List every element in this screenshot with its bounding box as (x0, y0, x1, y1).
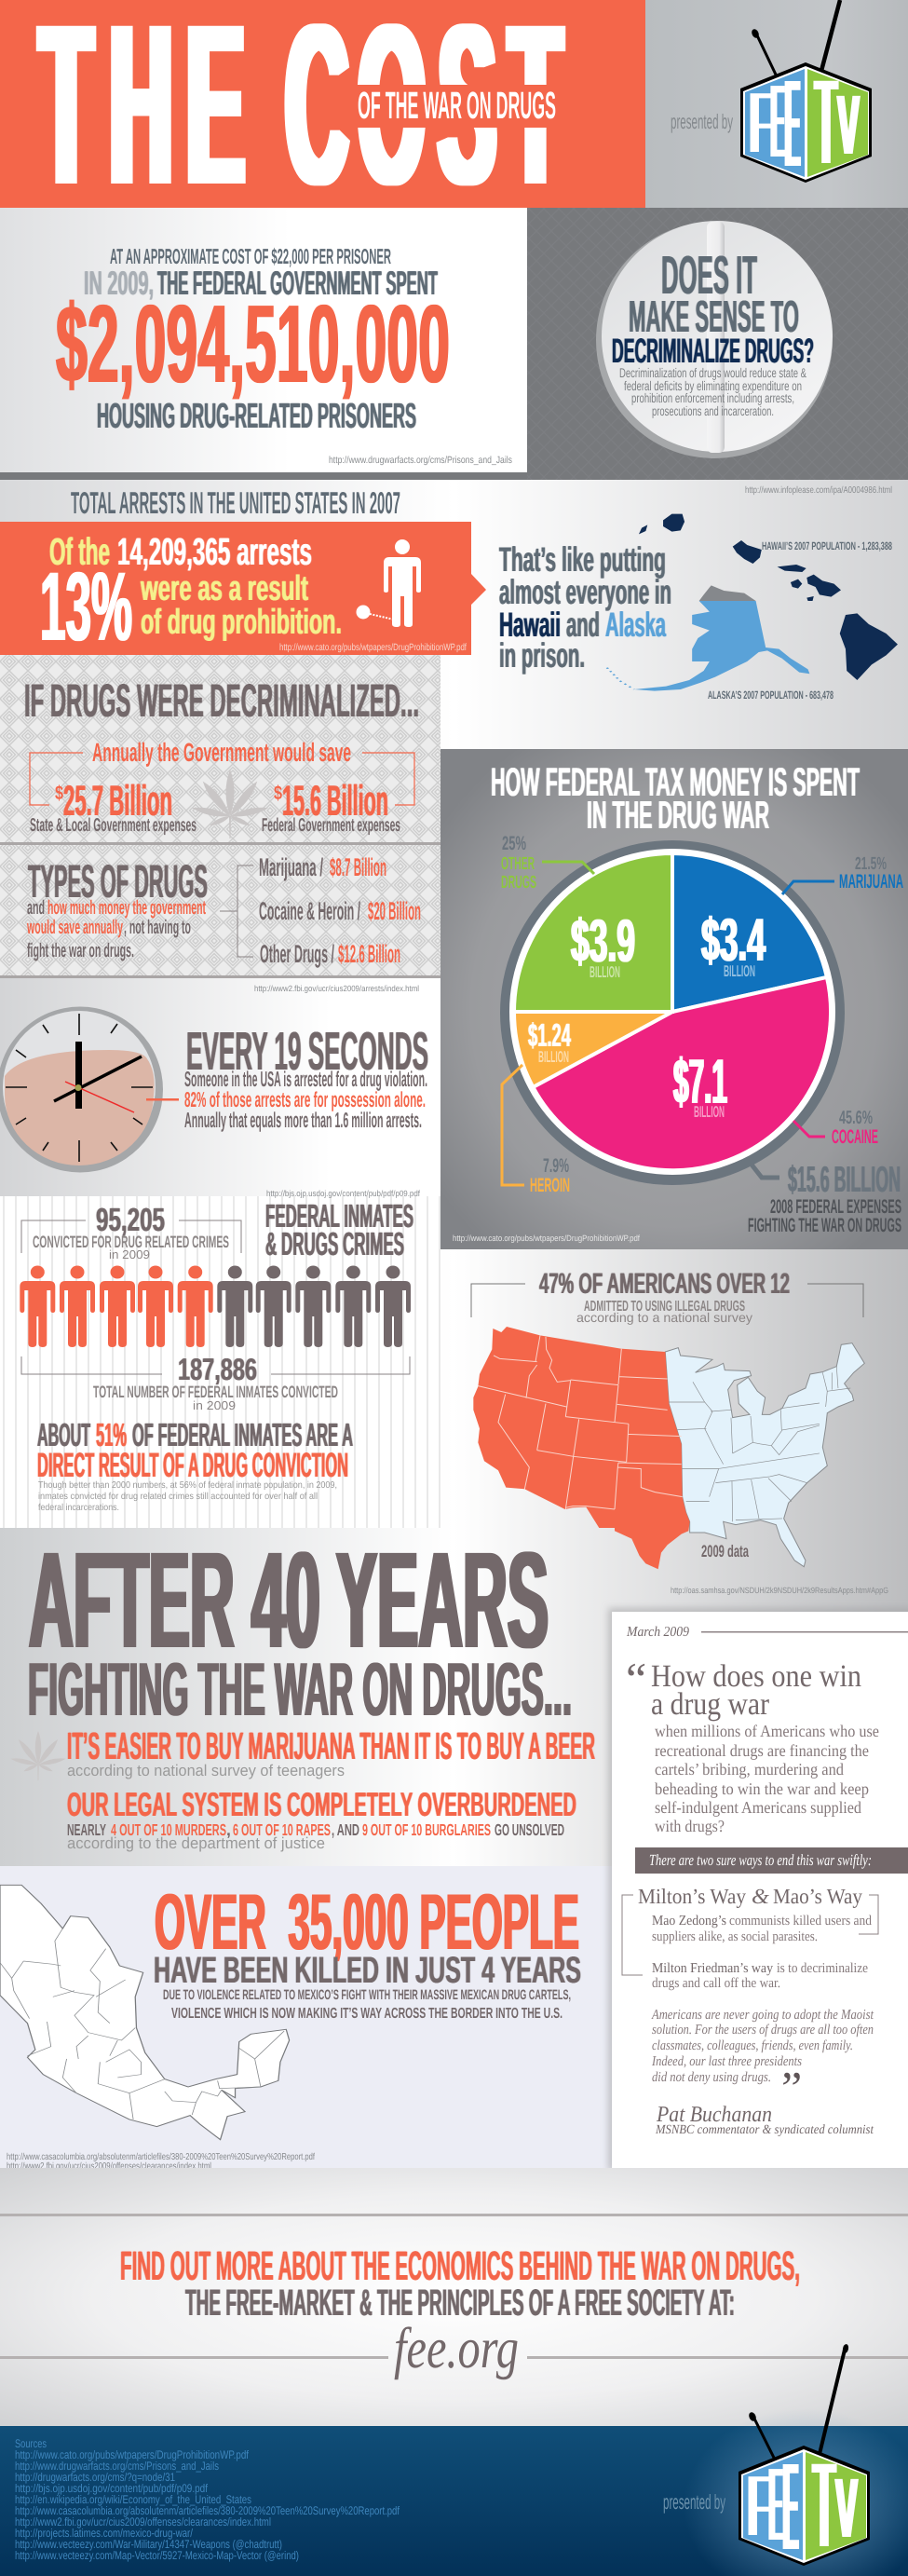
icon: FEE TV logo: V (835, 2456, 858, 2559)
text: sources list: http://en.wikipedia.org/wiki/Economy_of_the_United_States (15, 2493, 251, 2506)
text: how much money: would save annually (26, 917, 123, 938)
panel: Mexico (0, 1866, 615, 2172)
text: inmate explanation (38, 1480, 337, 1513)
map: United States (473, 1327, 864, 1569)
text: question body: with drugs? (655, 1817, 725, 1835)
text: unsolved crimes: NEARLY (67, 1820, 106, 1839)
panel: federal inmates (0, 1189, 440, 1528)
text: question body: recreational drugs are financing the (655, 1741, 869, 1760)
stat: federal savings (262, 776, 400, 836)
map: eastern states (665, 1343, 864, 1567)
text: unsolved crimes: GO UNSOLVED (495, 1820, 564, 1839)
icon: FEE TV logo: F (748, 2454, 769, 2558)
text: unsolved crimes: 9 OUT OF 10 BURGLARIES (362, 1820, 491, 1839)
stat: state and local savings (30, 776, 197, 836)
text: survey of teenagers: according to national survey of teenagers (67, 1762, 345, 1779)
text: sources list: http://www.drugwarfacts.org/cms/Prisons_and_Jails (15, 2460, 219, 2473)
panel: total arrests and population (0, 480, 908, 749)
slice value: other drugs (571, 906, 635, 981)
logo glow (684, 2408, 908, 2576)
text: Maoist solution: Indeed, our last three presidents (651, 2054, 802, 2069)
map: western states (473, 1327, 690, 1569)
text: attribution (655, 2103, 874, 2137)
stat: 187,886: 187,886 (178, 1352, 257, 1386)
panel: illegal drug use map (440, 1249, 908, 1622)
text: date: March 2009 (626, 1625, 689, 1640)
source url: http://www.cato.org/pubs/wtpapers/DrugProhibitionWP.pdf (279, 642, 467, 653)
label: convicted for drug crimes: CONVICTED FOR DRUG RELATED CRIMES (33, 1233, 229, 1251)
text: unsolved crimes (67, 1820, 564, 1839)
slice value: heroin (528, 1017, 571, 1066)
text: department of justice: according to the department of justice (67, 1834, 325, 1852)
bracket: drug list (220, 865, 253, 957)
label: in 2009: in 2009 (109, 1247, 150, 1261)
text: sources list: http://www.vecteezy.com/Map-Vector/5927-Mexico-Map-Vector (@erind) (15, 2549, 299, 2562)
text: unsolved crimes: 6 OUT OF 10 RAPES (233, 1820, 331, 1839)
banner: two sure ways (635, 1847, 908, 1874)
label: heroin: HEROIN (530, 1175, 570, 1196)
panel: total arrests and population: TOTAL ARRESTS IN THE UNITED STATES IN 2007 (71, 485, 400, 520)
icon: prisoner with ball and chain (356, 539, 421, 627)
chart: pie (500, 840, 845, 1185)
text: arrest statistics (184, 1067, 427, 1132)
icon: FEE TV logo: E (785, 49, 800, 197)
text: sources list: http://www.casacolumbia.org/absolutenm/articlefiles/380-2009%20Teen%20Survey%20Report.pdf (15, 2504, 400, 2517)
text: EVERY 19 SECONDS (186, 1021, 428, 1082)
map: Hawaii islands (639, 514, 898, 680)
text: ways comparison (652, 1914, 872, 1991)
text: inmate explanation: federal incarcerations. (38, 1503, 119, 1513)
panel: header title: OF THE WAR ON DRUGS (358, 84, 556, 127)
source urls: http://www2.fbi.gov/ucr/cius2009/offenses/clearances/index.html (7, 2161, 211, 2172)
panel: prisoner cost: THE FEDERAL GOVERNMENT SPENT (157, 264, 438, 302)
heading: federal inmates (265, 1198, 413, 1262)
heading: Milton's Way and Mao's Way: Milton’s Way (638, 1885, 746, 1908)
list: drug savings (259, 853, 421, 968)
heading: federal inmates: & DRUGS CRIMES (265, 1226, 404, 1262)
source urls: http://www.casacolumbia.org/absolutenm/articlefiles/380-2009%20Teen%20Survey%20Report.pdf (7, 2152, 315, 2162)
heading: about 51 percent: ABOUT (37, 1417, 90, 1453)
label: other drugs: 25% (502, 833, 526, 854)
heading: how does one win: How does one win (651, 1659, 861, 1694)
list: drug savings: Marijuana / (259, 853, 323, 881)
source url: http://www.drugwarfacts.org/cms/Prisons_and_Jails (329, 455, 512, 466)
label: other drugs (501, 833, 536, 893)
icons: ten inmate figures (20, 1265, 411, 1347)
bracket: survey (471, 1284, 863, 1317)
text: question body: when millions of Americans who use (655, 1722, 879, 1740)
text: question body: self-indulgent Americans supplied (655, 1798, 861, 1817)
presented by label: presented by (671, 110, 733, 133)
panel: federal inmates: OF FEDERAL INMATES ARE A (132, 1417, 353, 1453)
icon: FEE TV logo: V (837, 73, 860, 176)
slice value: cocaine (673, 1046, 727, 1121)
icon: cannabis leaf (191, 770, 269, 838)
label: cocaine (832, 1108, 878, 1148)
map: Mexico (0, 1885, 290, 2140)
panel: prisoner cost (0, 208, 527, 472)
panel: header title (0, 0, 645, 233)
text: pill explanation (619, 365, 806, 418)
text: pill explanation: federal deficits by eliminating expenditure on (624, 378, 802, 393)
text: sources list: http://www2.fbi.gov/ucr/cius2009/offenses/clearances/index.html (15, 2515, 271, 2528)
list: drug savings: Other Drugs / (260, 940, 334, 968)
panel: call to action (0, 2168, 908, 2426)
text: ways comparison: is to decriminalize (777, 1961, 868, 1976)
icon: cannabis leaf (10, 1731, 66, 1780)
panel: does it make sense (0, 208, 908, 480)
callout lines (502, 862, 834, 1185)
text: like putting in prison: in prison. (499, 636, 585, 675)
text: like putting in prison: That’s like putting (499, 540, 666, 579)
panel: federal tax money pie chart (440, 749, 908, 1249)
connector line (146, 1098, 179, 1101)
text: like putting in prison: Hawaii (499, 606, 561, 644)
text: Maoist solution (651, 2008, 874, 2085)
slice value: heroin: BILLION (538, 1048, 569, 1066)
label: 2009 data: 2009 data (701, 1542, 750, 1561)
source urls (7, 2152, 315, 2172)
heading: how does one win: a drug war (651, 1687, 770, 1722)
panel: after 40 years (0, 1524, 615, 1866)
icon: FEE TV logo (739, 2343, 870, 2576)
heading: how does one win (651, 1659, 861, 1722)
panel: prisoner cost: AT AN APPROXIMATE COST OF $22,000 PER PRISONER (110, 244, 391, 268)
text: arrests count: 14,209,365 arrests (117, 530, 312, 573)
text: like putting in prison: almost everyone in (499, 573, 671, 611)
icon: FEE TV logo: E (783, 2433, 798, 2576)
text: sources list: http://projects.latimes.com/mexico-drug-war/ (15, 2527, 193, 2540)
list: drug savings: $12.6 Billion (338, 940, 400, 968)
heading: Milton's Way and Mao's Way (638, 1885, 862, 1908)
text: question body: beheading to win the war and keep (655, 1779, 869, 1798)
stat: state and local savings: $ (55, 783, 63, 804)
label: marijuana (839, 854, 903, 893)
text: unsolved crimes: , (226, 1820, 231, 1839)
list: drug savings: Cocaine & Heroin / (259, 897, 360, 925)
text: violence explanation: VIOLENCE WHICH IS NOW MAKING IT’S WAY ACROSS THE BORDER INTO THE U.S. (171, 2006, 562, 2022)
text: admitted: ADMITTED TO USING ILLEGAL DRUGS (584, 1299, 745, 1315)
text: attribution: MSNBC commentator & syndicated columnist (655, 2123, 874, 2137)
stat: 95,205: 95,205 (96, 1202, 165, 1238)
text: inmate explanation: Though better than 2000 numbers, at 56% of federal inmate population, in 2009, (38, 1480, 337, 1491)
text: ways comparison: communists killed users and (729, 1914, 872, 1929)
panel: footer sources (0, 2343, 908, 2576)
text: how much money: , not having to (124, 917, 191, 938)
text: sources list: http://www.cato.org/pubs/wtpapers/DrugProhibitionWP.pdf (15, 2448, 249, 2461)
label: heroin (530, 1155, 570, 1196)
label: other drugs: DRUGS (501, 873, 536, 893)
panel: Pat Buchanan quote (608, 1608, 908, 2171)
band behind subtitle (347, 85, 580, 128)
slice value: marijuana: $3.4 (701, 906, 766, 974)
text: ways comparison: drugs and call off the war. (652, 1976, 780, 1991)
map: Alaska (607, 585, 809, 691)
text: question body (655, 1722, 879, 1835)
heading: killed in 4 years: HAVE BEEN KILLED IN JUST 4 YEARS (154, 1950, 581, 1991)
panel: federal tax money pie chart: $7.1 (673, 1046, 727, 1117)
icon: FEE TV logo: T (815, 51, 837, 194)
heading: Milton's Way and Mao's Way: & (752, 1885, 769, 1908)
heading: Milton's Way and Mao's Way: Mao’s Way (773, 1885, 862, 1908)
slice value: marijuana (701, 906, 766, 980)
text: inmate explanation: inmates convicted for drug related crimes still accounted for over half of all (38, 1492, 318, 1502)
banner: 13 percent arrests: 13% (40, 552, 132, 661)
panel: if drugs were decriminalized: $20 Billion (368, 897, 421, 925)
source url: http://www2.fbi.gov/ucr/cius2009/arrests/index.html (254, 984, 419, 993)
bracket: savings (30, 753, 414, 805)
panel: prisoner cost: HOUSING DRUG-RELATED PRISONERS (97, 397, 416, 436)
slice value: other drugs: BILLION (590, 963, 620, 981)
opening quote mark: “ (626, 1653, 646, 1705)
big number: $2,094,510,000 (56, 282, 450, 406)
text: like putting in prison: Alaska (605, 606, 666, 644)
list: drug savings: $8.7 Billion (330, 853, 386, 881)
text: Maoist solution: did not deny using drugs. (652, 2070, 771, 2085)
panel: presented by FEE TV (645, 0, 908, 208)
stat: state and local savings: 25.7 Billion (63, 776, 172, 825)
text: how much money: and (27, 897, 45, 919)
text: sources list: Sources (15, 2437, 47, 2450)
slice value: cocaine: BILLION (694, 1103, 725, 1121)
text: question body: cartels’ bribing, murdering and (655, 1760, 844, 1779)
text: pill explanation: Decriminalization of drugs would reduce state & (619, 365, 806, 380)
slice value: heroin: $1.24 (528, 1017, 571, 1054)
text: sources list: http://www.vecteezy.com/War-Military/14347-Weapons (@chadtrutt) (15, 2538, 282, 2551)
panel: federal inmates: DIRECT RESULT OF A DRUG CONVICTION (37, 1446, 348, 1484)
panel: if drugs were decriminalized (0, 655, 440, 978)
text: were as a result: were as a result (140, 569, 308, 608)
stat: federal savings: $ (274, 783, 282, 804)
text: sources list: http://bjs.ojp.usdoj.gov/content/pub/pdf/p09.pdf (15, 2482, 208, 2495)
slice value: marijuana: BILLION (724, 962, 755, 980)
icon: FEE TV logo: E (769, 2443, 782, 2567)
text: Someone in the USA is arrested for a drug violation. (184, 1067, 427, 1091)
icon: FEE TV logo: T (813, 2434, 835, 2576)
panel: if drugs were decriminalized: IF DRUGS WERE DECRIMINALIZED... (24, 675, 419, 727)
stat: state and local savings: State & Local Government expenses (30, 815, 197, 836)
heading: about 51 percent: 51% (96, 1417, 127, 1453)
bracket: total (21, 1356, 410, 1374)
text: unsolved crimes: , AND (332, 1820, 359, 1839)
icon: FEE TV logo: F (750, 71, 771, 175)
text: arrest statistics: 82% of those arrests are for possession alone. (184, 1087, 426, 1111)
stat: federal savings: 15.6 Billion (282, 776, 388, 825)
banner: 13 percent arrests (0, 522, 486, 661)
text: pill explanation: prohibition enforcement including arrests, (631, 390, 794, 405)
label: total inmates: TOTAL NUMBER OF FEDERAL INMATES CONVICTED (93, 1383, 338, 1401)
link: fee.org: fee.org (394, 2317, 519, 2380)
text: Maoist solution: classmates, colleagues, friends, even family. (652, 2038, 853, 2053)
heading: how federal tax money (491, 760, 860, 837)
closing quote mark: ” (781, 2062, 802, 2114)
text: how much money: fight the war on drugs. (27, 940, 134, 961)
panel: if drugs were decriminalized: how much money the government (47, 897, 206, 919)
text: of drug prohibition: of drug prohibition. (141, 603, 342, 642)
text: of the: Of the (49, 530, 110, 573)
text: Annually that equals more than 1.6 million arrests. (184, 1108, 422, 1132)
stat: federal savings: Federal Government expenses (262, 815, 400, 836)
label: marijuana: 21.5% (855, 854, 887, 874)
text: ways comparison: Milton Friedman’s way (652, 1961, 773, 1976)
text: how much money (26, 897, 206, 961)
icon: FEE TV logo (740, 0, 872, 197)
text: according to survey: according to a national survey (576, 1310, 752, 1325)
text: sources list: http://drugwarfacts.org/cms/?q=node/31 (15, 2471, 175, 2484)
text: in 2009: IN 2009, (84, 264, 154, 302)
text: violence explanation: DUE TO VIOLENCE RELATED TO MEXICO’S FIGHT WITH THEIR MASSIVE MEXICAN DRUG CARTELS, (163, 1987, 571, 2003)
text: unsolved crimes: 4 OUT OF 10 MURDERS (111, 1820, 226, 1839)
icon: clock (0, 1006, 163, 1172)
label: heroin: 7.9% (543, 1155, 569, 1177)
text: like putting in prison: and (566, 606, 600, 644)
total: 15.6 billion (748, 1160, 901, 1236)
text: Maoist solution: Americans are never going to adopt the Maoist (651, 2008, 874, 2023)
icon: FEE TV logo: E (771, 60, 784, 184)
text: pill explanation: prosecutions and incarceration. (652, 403, 774, 418)
panel: every 19 seconds (0, 978, 440, 1196)
text: attribution: Pat Buchanan (656, 2103, 772, 2127)
slice value: other drugs: $3.9 (571, 906, 635, 975)
panel: if drugs were decriminalized: TYPES OF DRUGS (28, 855, 208, 907)
text: ways comparison: Mao Zedong’s (652, 1914, 726, 1929)
presented by label: presented by (663, 2490, 725, 2514)
source url: http://www.cato.org/pubs/wtpapers/DrugProhibitionWP.pdf (453, 1233, 640, 1243)
panel: federal inmates: FEDERAL INMATES (265, 1198, 413, 1234)
icon: pill (596, 221, 833, 458)
text: like putting in prison (499, 540, 671, 675)
source url: http://bjs.ojp.usdoj.gov/content/pub/pdf/p09.pdf (266, 1189, 420, 1198)
label: other drugs: OTHER (501, 854, 535, 874)
text: annually save: Annually the Government would save (92, 738, 351, 767)
bracket: ways (622, 1895, 878, 1975)
bracket: convicted (21, 1220, 241, 1253)
heading: about 51 percent (37, 1417, 353, 1453)
label: in 2009: in 2009 (193, 1398, 236, 1412)
text: violence explanation (163, 1987, 571, 2022)
text: ways comparison: suppliers alike, as social parasites. (652, 1929, 818, 1944)
text: sources list (15, 2437, 400, 2562)
label: cocaine: 45.6% (839, 1108, 873, 1128)
panel: does it make sense: DOES IT (661, 245, 757, 306)
